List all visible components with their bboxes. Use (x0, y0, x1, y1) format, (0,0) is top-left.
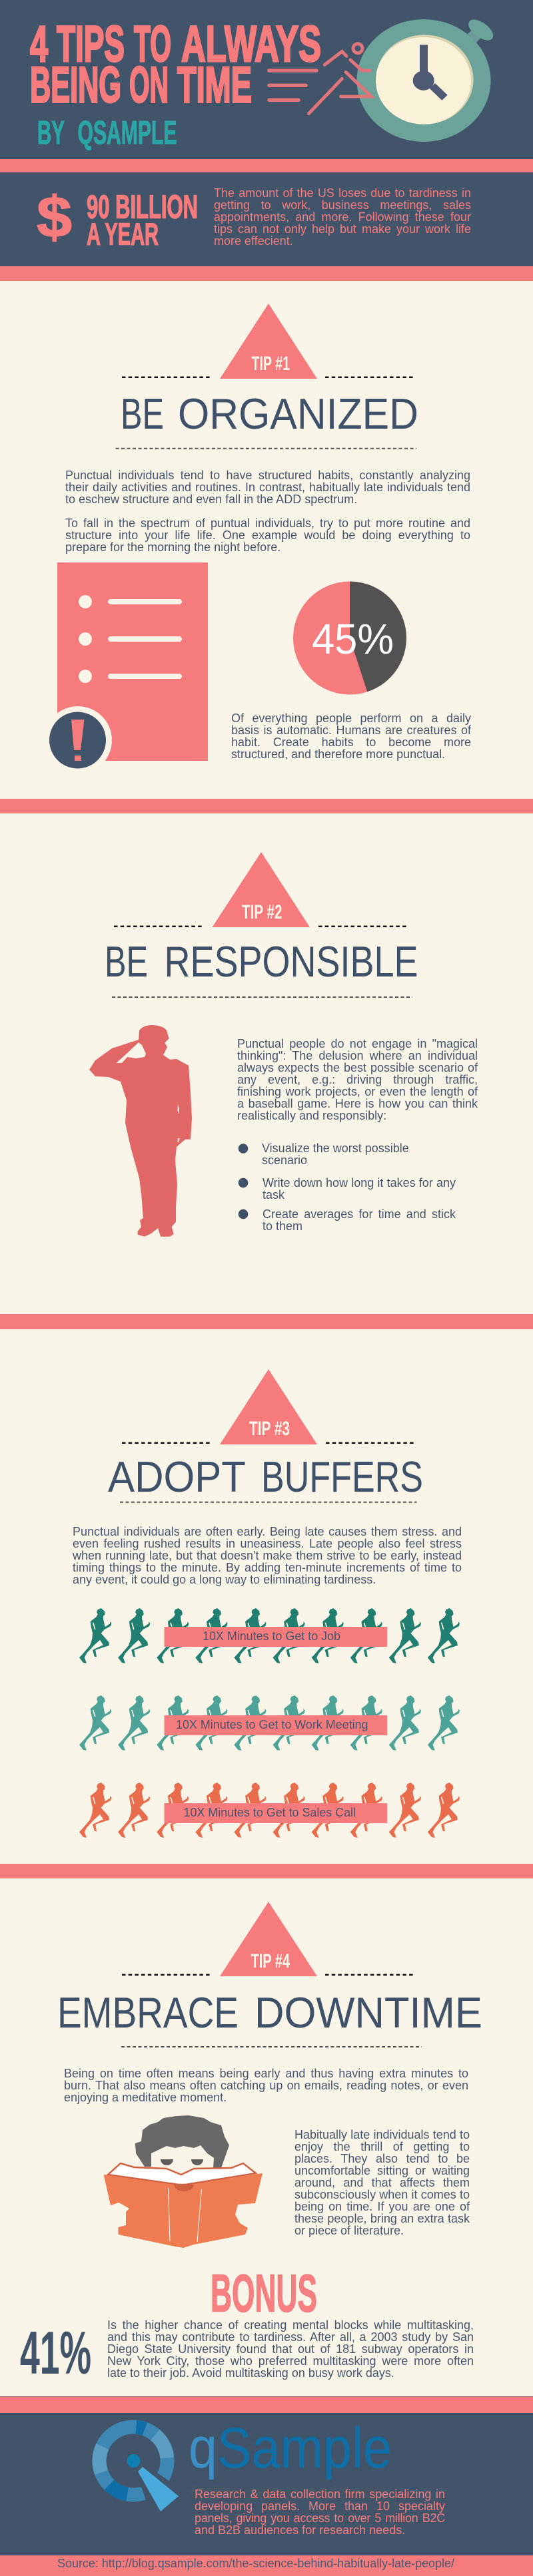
text block: routine advice: To fall in the spectrum of puntual individuals, try to put more routine and (65, 517, 470, 530)
title: ALWAYS (181, 16, 321, 73)
text block: automatic behaviour: Of everything people perform on a daily (231, 712, 471, 725)
panel: tip 4 (57, 1902, 482, 2248)
text block: multitasking: and this may contribute to tardiness. After all, a 2003 study by San (107, 2330, 474, 2344)
byline: BY (37, 115, 65, 151)
pie chart: 45% (293, 582, 406, 695)
icon: dollar sign: $ (37, 185, 72, 250)
text block: structured habits: to eschew structure and even fall in the ADD spectrum. (65, 493, 357, 506)
list item 2: Write down how long it takes for any (263, 1176, 456, 1189)
text block: habitually late: enjoy the thrill of getting to (294, 2140, 470, 2153)
text block: structured habits: their daily activities and routines. In contrast, habitually late individuals tend (65, 481, 470, 494)
text block: tardiness cost: more effecient. (214, 234, 293, 248)
list item 2 (263, 1176, 456, 1201)
divider band (0, 159, 533, 172)
logo: qSample mark (99, 2427, 187, 2523)
text block: habitually late: being on time. If you are one of (294, 2200, 470, 2213)
title: TIPS (57, 16, 125, 73)
panel: tip 3 (73, 1369, 462, 1838)
runner row: get to work meeting: 10X Minutes to Get to Work Meeting (176, 1718, 368, 1731)
heading: bonus: BONUS (211, 2263, 317, 2323)
tip badge 1: TIP #1 (252, 353, 290, 375)
text block: being early: when running late, but that doesn't make them strive to be early, instead (73, 1549, 462, 1562)
divider band (0, 2396, 533, 2413)
heading: be responsible: BE (105, 937, 148, 986)
heading: adopt buffers: ADOPT (108, 1452, 246, 1501)
panel: tip 1 (49, 304, 472, 768)
text block: automatic behaviour: basis is automatic. Humans are creatures of (231, 724, 471, 737)
text block: company description: developing panels. More than 10 specialty (195, 2499, 445, 2513)
panel: footer about qSample (0, 2413, 533, 2555)
text block: on time means early: burn. That also means often catching up on emails, reading notes, or even (64, 2079, 468, 2092)
panel: tip 2 (89, 852, 478, 1237)
list item 2: task (263, 1188, 284, 1201)
text block: magical thinking: a baseball game. Here is how you can think (237, 1097, 478, 1110)
pie chart: 45%: 45% (312, 615, 394, 663)
runner row: get to work meeting (79, 1695, 460, 1751)
icon: person reading a book (104, 2115, 263, 2248)
title: 4 (30, 16, 48, 73)
text block: routine advice: structure into your life life. One example would be doing everything to (65, 529, 470, 542)
runner row: get to job: 10X Minutes to Get to Job (203, 1629, 340, 1643)
text block: being early: even feeling rushed results in uneasiness. Late people also feel stress (73, 1537, 462, 1550)
source line: Source: http://blog.qsample.com/the-science-behind-habitually-late-people/ (57, 2557, 454, 2570)
text block: company description: panels, giving you access to over 5 million B2C (195, 2511, 445, 2525)
text block: company description: Research & data collection firm specializing in (195, 2487, 445, 2501)
tip badge 4 (122, 1902, 415, 1976)
stat: 90 billion a year (87, 189, 198, 252)
icon: checklist document (44, 562, 208, 774)
runner row: get to sales call: 10X Minutes to Get to Sales Call (184, 1806, 356, 1819)
text block: multitasking (107, 2318, 474, 2380)
runner row: get to sales call (79, 1783, 460, 1838)
title: BEING (30, 57, 121, 113)
title: TO (134, 16, 171, 73)
stat: 90 billion a year: A YEAR (87, 217, 159, 252)
header panel (0, 0, 533, 159)
logo: qSample wordmark: qSample (189, 2416, 392, 2480)
text block: habitually late: these people, bring an extra task (294, 2212, 470, 2225)
panel: 90 billion stat (0, 172, 533, 266)
text block: tardiness cost: tips can not only help but make your work life (214, 222, 471, 236)
panel: bonus (20, 2263, 474, 2387)
text block: automatic behaviour (231, 712, 472, 761)
tip badge 2: TIP #2 (242, 901, 282, 923)
text block: routine advice (65, 517, 470, 554)
text block: tardiness cost: getting to work, business meetings, sales (214, 198, 471, 212)
heading: be responsible (105, 937, 418, 986)
heading: be responsible: RESPONSIBLE (164, 937, 418, 986)
byline: QSAMPLE (77, 115, 177, 151)
text block: tardiness cost (214, 186, 471, 248)
list item 3 (263, 1207, 456, 1233)
divider band (0, 1314, 533, 1329)
tip badge 1 (122, 304, 415, 379)
text block: habitually late: around, and that affects them (294, 2176, 470, 2189)
list item 1 (262, 1142, 409, 1167)
text block: magical thinking (237, 1037, 478, 1122)
icon: saluting soldier silhouette (89, 1025, 192, 1237)
tip badge 3 (122, 1369, 416, 1444)
list item 1: scenario (262, 1154, 307, 1167)
text block: multitasking: late to their job. Avoid multitasking on busy work days. (107, 2366, 394, 2380)
text block: tardiness cost: The amount of the US loses due to tardiness in (214, 186, 471, 200)
text block: habitually late: or piece of literature. (294, 2224, 404, 2237)
list item 3: Create averages for time and stick (263, 1207, 456, 1221)
heading: embrace downtime: DOWNTIME (255, 1988, 482, 2037)
tip badge 4: TIP #4 (251, 1950, 290, 1972)
text block: on time means early: Being on time often means being early and thus having extra minutes to (64, 2067, 468, 2080)
text block: habitually late: subconsciously when it comes to (294, 2188, 470, 2201)
text block: magical thinking: thinking": The delusion where an individual (237, 1049, 478, 1062)
text block: habitually late: uncomfortable sitting or waiting (294, 2164, 470, 2177)
tip badge 3: TIP #3 (249, 1418, 290, 1440)
heading: embrace downtime: EMBRACE (57, 1988, 239, 2037)
icon: stopwatch (357, 15, 497, 142)
text block: being early: Punctual individuals are often early. Being late causes them stress. and (73, 1525, 462, 1538)
text block: structured habits: Punctual individuals tend to have structured habits, constantly analyzing (65, 469, 470, 482)
text block: habitually late: Habitually late individuals tend to (294, 2128, 470, 2141)
text block: company description: and B2B audiences for research needs. (195, 2523, 405, 2537)
tip badge 2 (114, 852, 408, 927)
divider band (0, 1864, 533, 1878)
text block: on time means early (64, 2067, 468, 2104)
text block: routine advice: prepare for the morning the night before. (65, 540, 280, 554)
text block: being early: any event, it could go a long way to eliminating tardiness. (73, 1573, 376, 1586)
text block: habitually late: places. They also tend to be (294, 2152, 470, 2165)
stat: 41%: 41% (20, 2320, 91, 2387)
text block: company description (195, 2487, 445, 2537)
heading: adopt buffers (108, 1452, 423, 1501)
text block: magical thinking: always expects the best possible scenario of (237, 1061, 478, 1074)
text block: multitasking: Is the higher chance of creating mental blocks while multitasking, (107, 2318, 474, 2332)
byline (37, 115, 177, 151)
text block: automatic behaviour: habit. Create habits to become more (231, 736, 471, 749)
text block: magical thinking: finishing work projects, or even the length of (237, 1085, 478, 1098)
heading: adopt buffers: BUFFERS (261, 1452, 423, 1501)
text block: multitasking: Diego State University found that out of 181 subway operators in (107, 2342, 474, 2356)
text block: magical thinking: Punctual people do not engage in "magical (237, 1037, 478, 1050)
text block: being early: timing things to the minute. By adding ten-minute increments of time to (73, 1561, 462, 1574)
text block: magical thinking: any event, e.g.: driving through traffic, (237, 1073, 478, 1086)
source line (0, 2555, 533, 2576)
heading: be organized: ORGANIZED (178, 389, 418, 438)
logo tagline: Online sample made easy (190, 2482, 387, 2503)
text block: being early (73, 1525, 462, 1586)
title: ON (129, 57, 169, 113)
text block: multitasking: New York City, those who preferred multitasking were more often (107, 2354, 474, 2368)
icon: running figure with speed lines (269, 44, 371, 114)
list item 1: Visualize the worst possible (262, 1142, 409, 1155)
text block: on time means early: enjoying a meditative moment. (64, 2091, 227, 2104)
text block: structured habits (65, 469, 470, 506)
title (30, 16, 321, 113)
bullets (239, 1144, 248, 1219)
heading: be organized: BE (121, 389, 164, 438)
text block: tardiness cost: appointments, and more. Following these four (214, 210, 471, 224)
list item 3: to them (263, 1219, 302, 1233)
heading: embrace downtime (57, 1988, 482, 2037)
divider band (0, 799, 533, 813)
text block: habitually late (294, 2128, 470, 2237)
text block: magical thinking: realistically and responsibly: (237, 1109, 386, 1122)
stat: 90 billion a year: 90 BILLION (87, 189, 198, 225)
title: TIME (177, 57, 252, 113)
text block: automatic behaviour: structured, and therefore more punctual. (231, 748, 445, 761)
divider band (0, 266, 533, 281)
runner row: get to job (79, 1608, 460, 1663)
